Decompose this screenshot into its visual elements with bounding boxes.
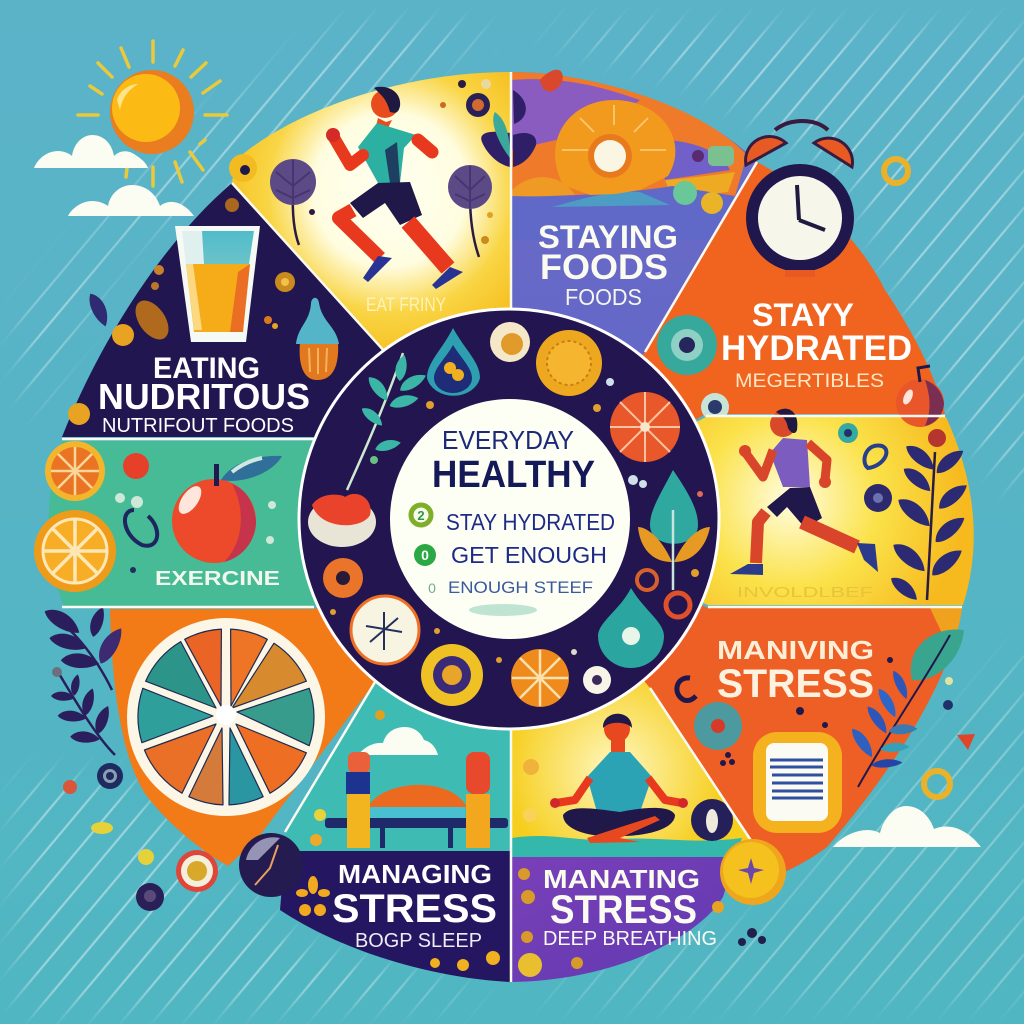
panel: managing stress orange right — [509, 519, 962, 876]
icon: flower — [296, 876, 330, 916]
sub-element: small rings — [673, 146, 734, 214]
icon: meditating figure — [550, 714, 688, 843]
center hub — [299, 309, 719, 729]
icon: gold ring — [924, 771, 950, 797]
icon: teal ring — [657, 315, 717, 375]
icon: small red ring — [176, 850, 218, 892]
icon: apple — [172, 456, 282, 563]
heading: stress: STRESS — [332, 887, 497, 931]
icon: citrus — [610, 392, 680, 462]
icon: blue leaves right — [888, 429, 970, 604]
heading: everyday: EVERYDAY — [442, 425, 574, 455]
heading: exercise: EXERCINE — [155, 568, 280, 590]
icon: small teal ring — [701, 393, 729, 421]
heading: nutritious: NUDRITOUS — [98, 376, 310, 417]
heading: stress: STRESS — [550, 888, 697, 932]
icon: apple right — [896, 366, 944, 427]
panel: eating nutritious foods — [62, 183, 509, 519]
icon: teal leaf — [638, 470, 710, 590]
sub-element: plant right — [448, 165, 492, 257]
heading: hydrated: HYDRATED — [721, 329, 912, 368]
icon: ring small bottom — [637, 570, 690, 617]
icon: dark leaves upper sprig — [41, 604, 127, 690]
icon: sunburst — [555, 100, 675, 195]
heading: maniving: MANIVING — [717, 635, 874, 665]
panel: exercise green — [49, 441, 509, 606]
sub-element: spots left — [63, 780, 154, 865]
sub-element: teal ring — [838, 423, 858, 443]
sub-element: red fruit — [540, 70, 563, 92]
icon: alarm clock — [746, 121, 854, 277]
number badge 1 — [411, 505, 431, 525]
number badge 1: 2 — [417, 508, 425, 523]
icon: citrus wheel — [127, 618, 325, 816]
icon: juice glass — [175, 226, 260, 342]
sub-label: BOGP SLEEP — [355, 930, 482, 952]
sub-element: ring doodle — [125, 510, 157, 546]
icon: white ring — [583, 666, 611, 694]
sub-label: DEEP BREATHING — [543, 928, 717, 950]
icon: cloud lower right — [833, 806, 981, 847]
panel: good sleep navy — [280, 851, 510, 982]
hub ring — [299, 309, 719, 729]
icon: orange slice large — [34, 510, 116, 592]
sub-element: yellow tip — [229, 154, 257, 182]
icon: bed — [325, 752, 508, 848]
icon: dark sphere — [239, 833, 303, 897]
sub-element: small yellow — [310, 710, 385, 846]
sub-element: dots — [115, 493, 276, 573]
sub-element: leaf sprig — [481, 90, 536, 167]
heading: eating: EATING — [153, 352, 260, 385]
heading: stayy: STAYY — [752, 297, 854, 333]
number badge 2: 0 — [421, 547, 429, 563]
panel: foods purple — [481, 70, 757, 519]
panel: orange citrus segment — [110, 519, 509, 866]
sub-element: small items — [523, 759, 539, 822]
heading: staying: STAYING — [538, 219, 678, 255]
heading: manating: MANATING — [543, 864, 700, 894]
icon: teal drop — [598, 588, 664, 668]
panel: meditation yellow — [509, 519, 752, 857]
sub-element: seeds — [430, 951, 500, 971]
sub-element: ring — [466, 93, 490, 117]
sub-element: doodle — [864, 445, 886, 468]
icon: purple dot — [136, 883, 164, 911]
number badge 3: 0 — [428, 580, 436, 596]
sub-element: leaf — [85, 290, 113, 329]
panel: exercise yellow top — [229, 72, 510, 519]
sub-element: plant left — [270, 159, 316, 245]
icon: leaves lower right — [848, 616, 974, 787]
icon: honey bottle — [296, 298, 339, 380]
panel: good sleep teal — [285, 519, 512, 851]
icon: gold disc — [536, 330, 602, 396]
icon: orange ring — [323, 558, 363, 598]
icon: apple — [308, 494, 376, 547]
icon: ring — [490, 322, 530, 362]
sub-element: caption: INVOLDLBEF — [737, 584, 873, 601]
icon: cloud upper left — [34, 135, 148, 168]
number badge 2 — [414, 544, 436, 566]
sub-element: doodle — [677, 678, 696, 701]
icon: navy ring dot — [97, 763, 123, 789]
icon: gold coin — [720, 839, 786, 905]
icon: white disc — [351, 596, 419, 664]
list item: GET ENOUGH — [451, 542, 607, 568]
sub-element: teal smudge — [469, 604, 537, 616]
icon: cloud left — [68, 185, 194, 216]
icon: runner top — [326, 87, 463, 289]
heading: stress: STRESS — [717, 662, 874, 706]
sub-element: seeds — [518, 868, 724, 977]
icon: runner right — [730, 409, 878, 575]
panel: deep breathing purple — [512, 857, 735, 982]
sub-element: tomato — [123, 453, 149, 479]
icon: leaf branch — [347, 353, 428, 490]
icon: blueberry — [864, 484, 892, 512]
icon: cloud in panel — [358, 727, 438, 755]
heading: foods: FOODS — [540, 248, 668, 287]
dividers — [62, 72, 962, 982]
sub-element: panel caption: EAT FRINY — [366, 295, 446, 316]
icon: orange slice — [511, 649, 569, 707]
icon: teal blob — [694, 702, 742, 750]
icon: tablet — [753, 732, 842, 833]
sub-element: nuts — [68, 198, 295, 425]
sub-element: dots — [720, 657, 893, 766]
icon: water drop — [427, 328, 480, 396]
sub-element: hub speckles — [330, 378, 703, 663]
list item: STAY HYDRATED — [446, 509, 615, 535]
sub-element: spots right — [738, 677, 975, 946]
sub-label: FOODS — [565, 284, 642, 310]
panel: stay hydrated — [509, 162, 945, 519]
heading: healthy: HEALTHY — [432, 454, 595, 496]
icon: yellow ring top right — [884, 159, 908, 183]
list item: ENOUGH STEEF — [448, 578, 593, 597]
sub-element: dots — [309, 79, 493, 244]
heading: managing: MANAGING — [338, 859, 492, 889]
center circle — [390, 399, 630, 639]
icon: dark leaves lower sprig — [51, 667, 115, 755]
sub-label: MEGERTIBLES — [735, 371, 884, 392]
icon: navy circle badge — [691, 799, 733, 841]
sub-label: NUTRIFOUT FOODS — [102, 415, 294, 437]
icon: orange slice small — [45, 441, 105, 501]
panel: exercise yellow right — [509, 409, 974, 605]
icon: yellow ring — [421, 644, 483, 706]
icon: sun — [78, 41, 227, 186]
